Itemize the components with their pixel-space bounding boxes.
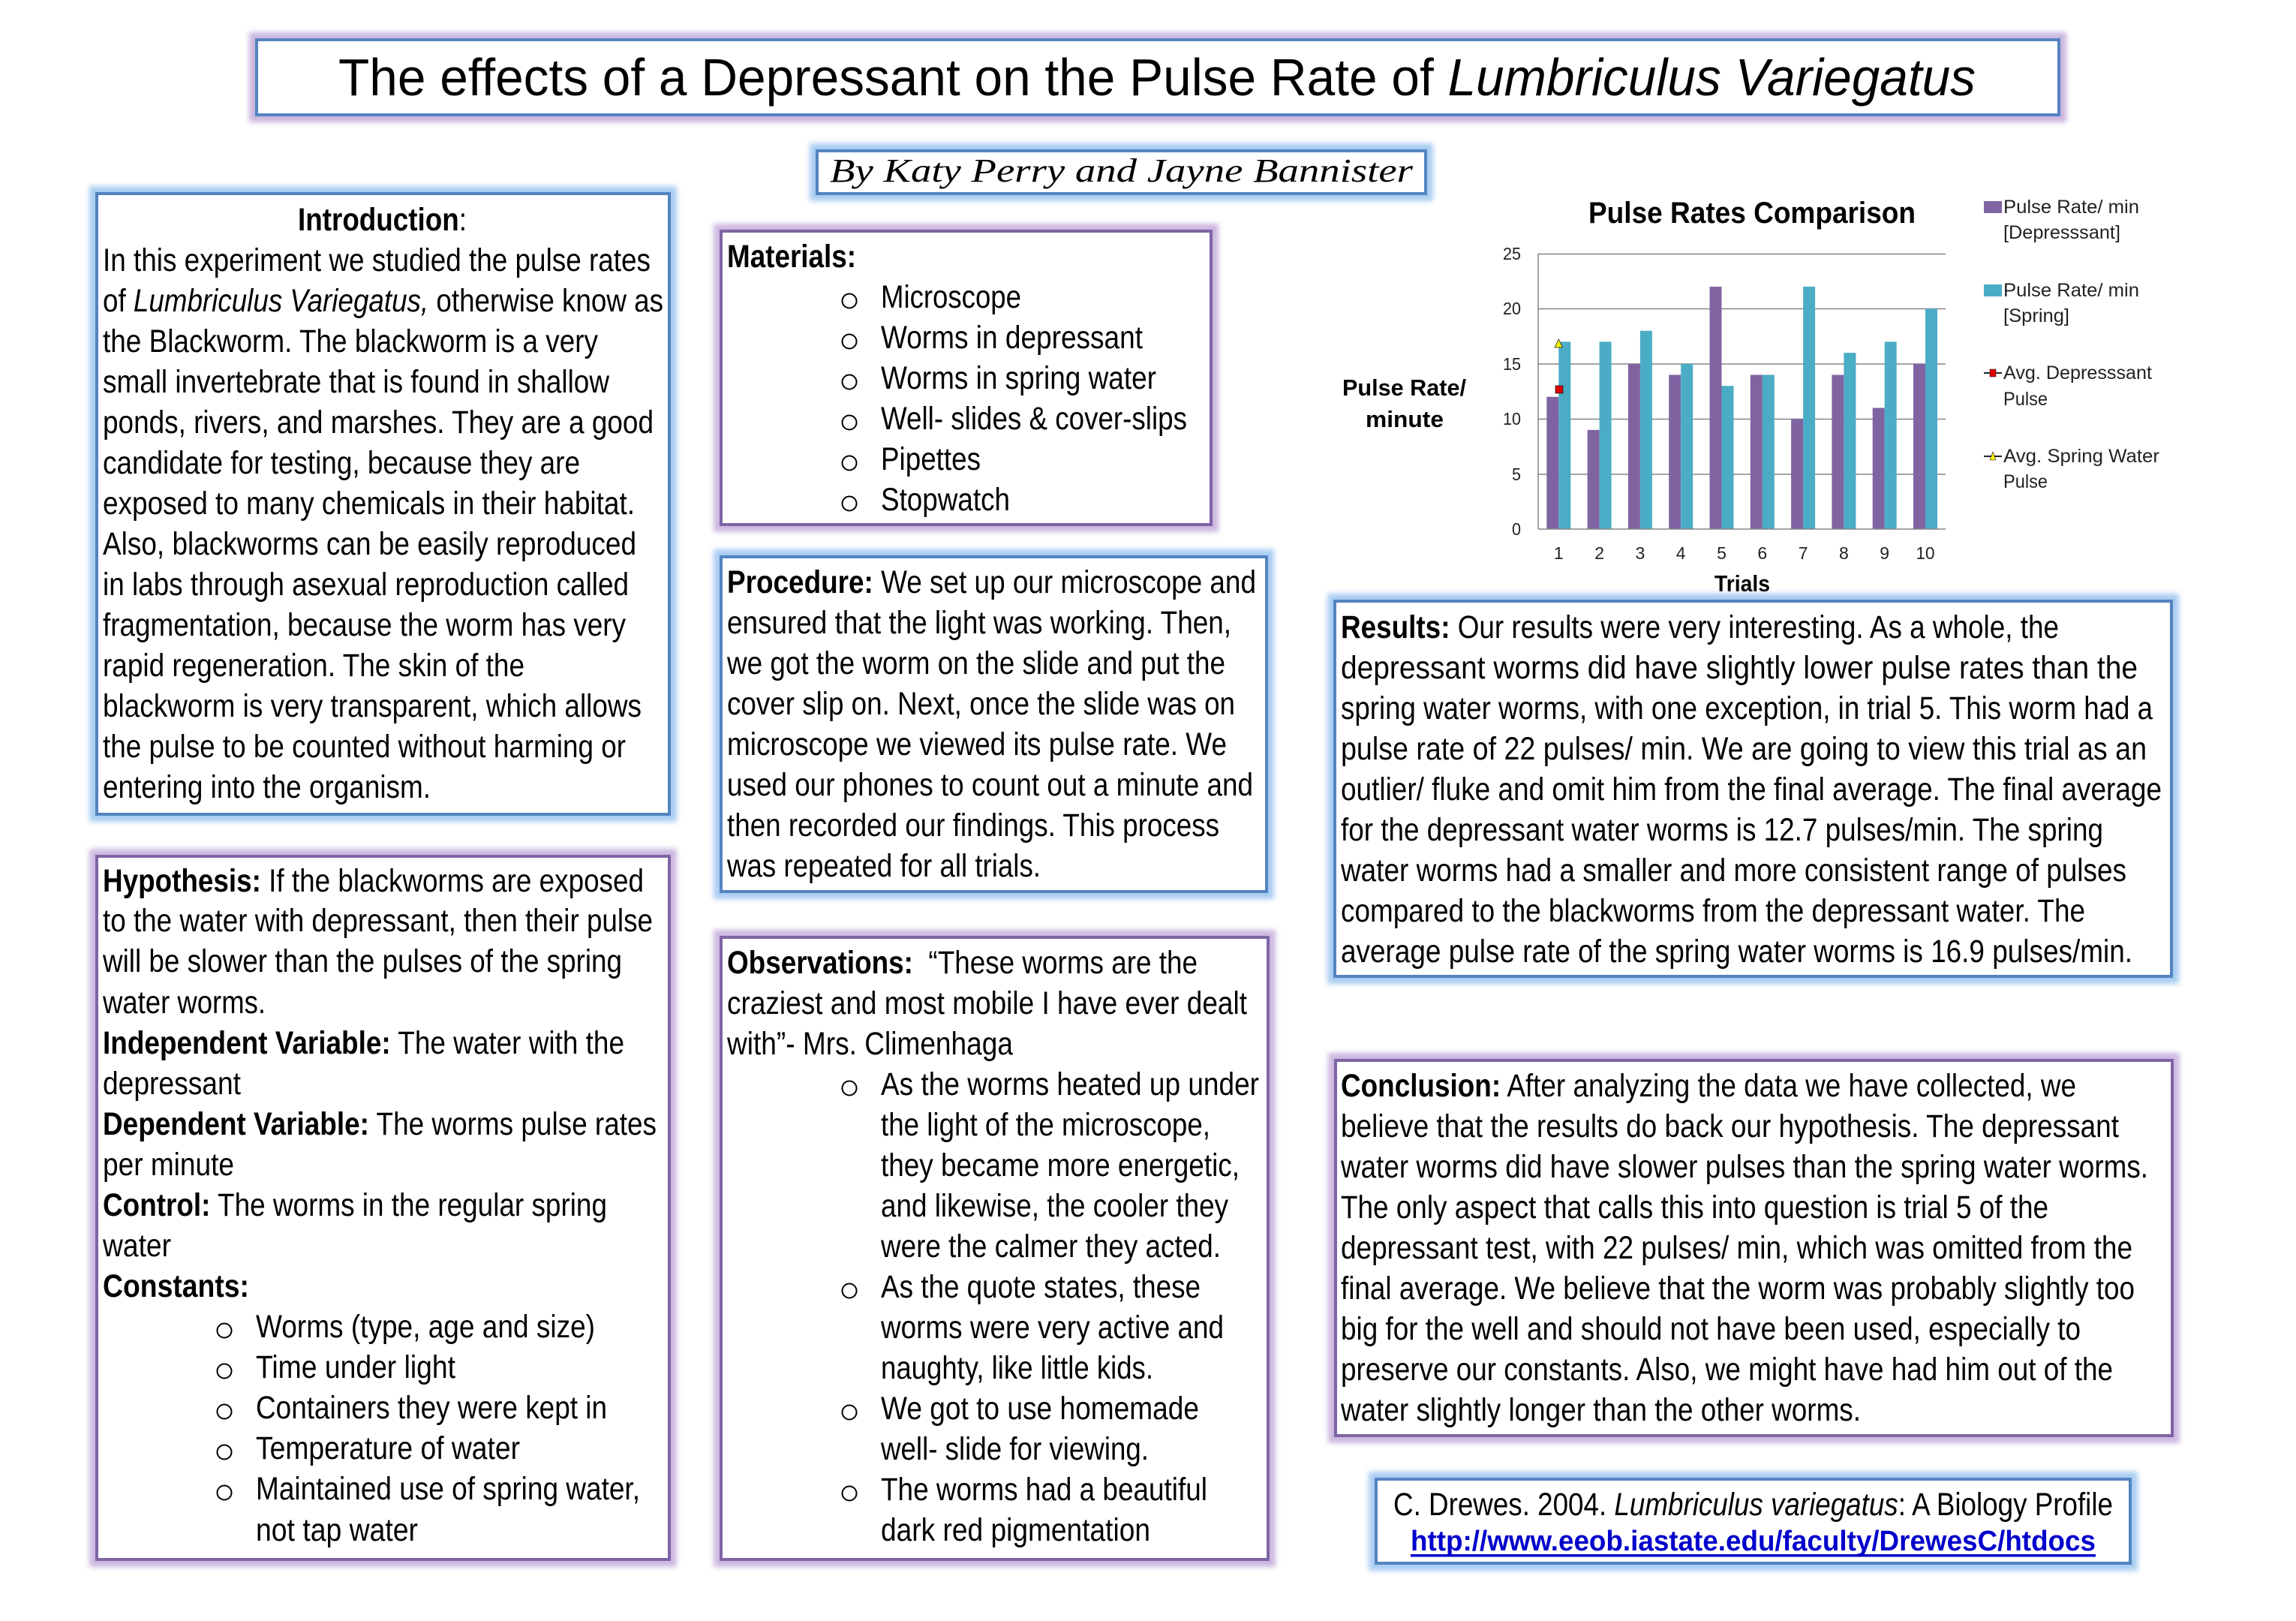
panel: introduction: ponds, rivers, and marshes. They are a good — [103, 404, 654, 441]
panel: conclusion: The only aspect that calls this into question is trial 5 of the — [1341, 1189, 2048, 1226]
panel: introduction: candidate for testing, because they are — [103, 445, 580, 481]
panel: procedure: ensured that the light was working. Then, — [727, 605, 1231, 641]
panel: conclusion: Conclusion: After analyzing the data we have collected, we — [1341, 1068, 2076, 1104]
panel: results: pulse rate of 22 pulses/ min. We are going to view this trial as an — [1341, 731, 2147, 767]
x axis labels: 5 — [1717, 543, 1727, 563]
y axis title: Pulse Rate/ — [1342, 374, 1466, 401]
panel: results: average pulse rate of the spring water worms is 16.9 pulses/min. — [1341, 934, 2132, 970]
panel: introduction: fragmentation, because the worm has very — [103, 607, 626, 643]
x axis title: Trials — [1714, 570, 1770, 597]
panel: procedure: was repeated for all trials. — [726, 848, 1041, 884]
x axis labels: 1 — [1554, 543, 1564, 563]
panel: materials: Stopwatch — [881, 482, 1010, 518]
panel: conclusion — [1328, 1053, 2180, 1443]
legend: Pulse — [2003, 389, 2048, 410]
panel: observations: The worms had a beautiful — [881, 1472, 1207, 1508]
x axis labels: 6 — [1757, 543, 1767, 563]
depressant bars — [1546, 287, 1925, 529]
average markers — [1555, 339, 1563, 393]
panel: introduction: of Lumbriculus Variegatus, otherwise know as — [103, 283, 663, 319]
panel: procedure: Procedure: We set up our microscope and — [727, 564, 1256, 600]
panel: observations: craziest and most mobile I have ever dealt — [727, 985, 1247, 1021]
authors byline: By Katy Perry and Jayne Bannister — [830, 152, 1414, 189]
panel: conclusion: water slightly longer than the other worms. — [1340, 1392, 1861, 1428]
y axis labels: 25 — [1503, 244, 1521, 263]
panel: hypothesis and variables: Temperature of water — [256, 1430, 520, 1466]
panel: observations: As the quote states, these — [881, 1269, 1201, 1305]
panel: conclusion: final average. We believe that the worm was probably slightly too — [1341, 1271, 2135, 1307]
x axis labels: 10 — [1916, 543, 1934, 563]
panel: introduction: the Blackworm. The blackworm is a very — [103, 323, 598, 359]
panel: hypothesis and variables: Worms (type, age and size) — [256, 1309, 595, 1345]
y axis title: minute — [1366, 406, 1444, 432]
panel: materials: Materials: — [727, 239, 856, 275]
panel: hypothesis and variables: Control: The worms in the regular spring — [103, 1187, 607, 1223]
panel: observations: and likewise, the cooler they — [881, 1188, 1228, 1224]
panel: conclusion: believe that the results do back our hypothesis. The depressant — [1341, 1108, 2119, 1144]
x axis labels: 2 — [1594, 543, 1604, 563]
x axis labels: 4 — [1676, 543, 1686, 563]
panel: observations: well- slide for viewing. — [880, 1431, 1149, 1467]
y axis labels — [1503, 244, 1521, 539]
panel: introduction: Also, blackworms can be easily reproduced — [103, 526, 636, 562]
panel: introduction: Introduction: — [298, 202, 467, 238]
panel: results: Results: Our results were very interesting. As a whole, the — [1341, 609, 2059, 645]
panel: conclusion: big for the well and should not have been used, especially to — [1341, 1311, 2081, 1347]
y axis labels: 15 — [1503, 354, 1521, 374]
panel: hypothesis and variables: per minute — [103, 1147, 234, 1183]
y axis labels: 5 — [1512, 465, 1521, 484]
panel: results: water worms had a smaller and more consistent range of pulses — [1340, 853, 2126, 889]
legend: Pulse Rate/ min — [2003, 280, 2139, 301]
panel: procedure — [714, 549, 1274, 899]
title: The effects of a Depressant on the Pulse Rate of Lumbriculus Variegatus — [338, 48, 1976, 107]
panel: introduction: rapid regeneration. The skin of the — [103, 648, 524, 684]
chart title: Pulse Rates Comparison — [1588, 197, 1916, 230]
panel: observations: worms were very active and — [880, 1310, 1224, 1346]
panel: results: depressant worms did have slightly lower pulse rates than the — [1341, 650, 2138, 686]
panel: materials: Well- slides & cover-slips — [881, 401, 1187, 437]
panel: observations: were the calmer they acted. — [880, 1229, 1221, 1265]
panel: observations: Observations: “These worms are the — [727, 945, 1198, 981]
panel: hypothesis and variables: Time under light — [256, 1349, 455, 1385]
panel: materials — [714, 224, 1219, 532]
panel: observations: naughty, like little kids. — [881, 1350, 1153, 1386]
panel: hypothesis and variables: Hypothesis: If the blackworms are exposed — [103, 863, 644, 899]
legend: [Depresssant] — [2003, 222, 2120, 243]
panel: results — [1327, 594, 2179, 984]
x axis labels: 9 — [1880, 543, 1889, 563]
panel: hypothesis and variables: Maintained use of spring water, — [256, 1471, 640, 1507]
panel: hypothesis and variables: Independent Variable: The water with the — [103, 1025, 624, 1061]
panel: introduction: in labs through asexual reproduction called — [103, 567, 629, 603]
panel: conclusion: preserve our constants. Also, we might have had him out of the — [1341, 1352, 2113, 1388]
panel: materials: Worms in spring water — [881, 360, 1156, 396]
panel: conclusion: depressant test, with 22 pulses/ min, which was omitted from the — [1341, 1230, 2132, 1266]
panel: materials: Microscope — [881, 279, 1021, 315]
panel: hypothesis and variables: Constants: — [103, 1268, 249, 1304]
bar chart: pulse rates comparison — [1342, 197, 2159, 597]
legend: Pulse — [2003, 471, 2048, 492]
legend: Avg. Depresssant — [2003, 362, 2152, 383]
x axis labels: 7 — [1799, 543, 1808, 563]
panel: citation — [1369, 1472, 2138, 1571]
y axis labels: 20 — [1503, 299, 1521, 318]
x axis labels: 8 — [1839, 543, 1849, 563]
gridlines and axes — [1538, 254, 1946, 529]
panel: observations: As the worms heated up under — [881, 1066, 1259, 1102]
authors byline — [810, 143, 1433, 201]
y axis title — [1342, 374, 1466, 432]
spring water bars — [1558, 287, 1937, 529]
panel: materials: Pipettes — [881, 441, 981, 477]
legend: [Spring] — [2003, 305, 2069, 326]
panel: hypothesis and variables: depressant — [103, 1066, 241, 1102]
panel: hypothesis and variables: Dependent Variable: The worms pulse rates — [103, 1106, 657, 1142]
panel: hypothesis and variables: Containers they were kept in — [256, 1390, 607, 1426]
x axis labels: 3 — [1636, 543, 1645, 563]
panel: citation: C. Drewes. 2004. Lumbriculus variegatus: A Biology Profile — [1393, 1487, 2113, 1523]
panel: results: compared to the blackworms from the depressant water. The — [1341, 893, 2085, 929]
panel: introduction: entering into the organism. — [103, 769, 431, 805]
panel: observations — [714, 930, 1276, 1567]
panel: procedure: used our phones to count out a minute and — [727, 767, 1253, 803]
y axis labels: 10 — [1503, 409, 1521, 429]
panel: introduction: blackworm is very transparent, which allows — [103, 688, 642, 724]
panel: results: for the depressant water worms is 12.7 pulses/min. The spring — [1341, 812, 2103, 848]
panel: materials: Worms in depressant — [881, 320, 1143, 356]
panel: citation: http://www.eeob.iastate.edu/faculty/DrewesC/htdocs — [1411, 1526, 2096, 1557]
y axis labels: 0 — [1512, 519, 1521, 539]
panel: observations: with”- Mrs. Climenhaga — [726, 1026, 1013, 1062]
panel: introduction — [89, 186, 677, 822]
legend: Pulse Rate/ min — [2003, 197, 2139, 218]
panel: procedure: then recorded our findings. This process — [727, 807, 1219, 844]
x axis line — [1538, 528, 1946, 530]
panel: hypothesis and variables: water — [102, 1228, 171, 1264]
panel: introduction: In this experiment we studied the pulse rates — [103, 242, 651, 278]
panel: conclusion: water worms did have slower pulses than the spring water worms. — [1340, 1149, 2148, 1185]
panel: procedure: cover slip on. Next, once the slide was on — [727, 686, 1235, 722]
panel: hypothesis and variables: to the water with depressant, then their pulse — [103, 903, 653, 939]
panel: results: spring water worms, with one exception, in trial 5. This worm had a — [1341, 690, 2153, 726]
panel: procedure: microscope we viewed its pulse rate. We — [727, 726, 1227, 762]
panel: results: outlier/ fluke and omit him from the final average. The final average — [1341, 771, 2162, 807]
panel: introduction: the pulse to be counted without harming or — [103, 729, 626, 765]
panel: hypothesis and variables: will be slower than the pulses of the spring — [102, 943, 622, 979]
panel: observations: they became more energetic, — [881, 1147, 1240, 1183]
panel: observations: We got to use homemade — [881, 1391, 1199, 1427]
legend — [1984, 197, 2159, 492]
panel: introduction: small invertebrate that is found in shallow — [103, 364, 610, 400]
panel: procedure: we got the worm on the slide and put the — [726, 645, 1225, 681]
legend: Avg. Spring Water — [2003, 446, 2159, 467]
panel: observations: the light of the microscope, — [881, 1107, 1210, 1143]
x axis labels — [1554, 543, 1934, 563]
title — [249, 32, 2066, 122]
panel: hypothesis and variables: water worms. — [102, 985, 266, 1021]
panel: hypothesis and variables — [89, 849, 677, 1567]
panel: hypothesis and variables: not tap water — [256, 1512, 418, 1548]
panel: observations: dark red pigmentation — [881, 1512, 1150, 1548]
panel: introduction: exposed to many chemicals in their habitat. — [103, 486, 635, 522]
